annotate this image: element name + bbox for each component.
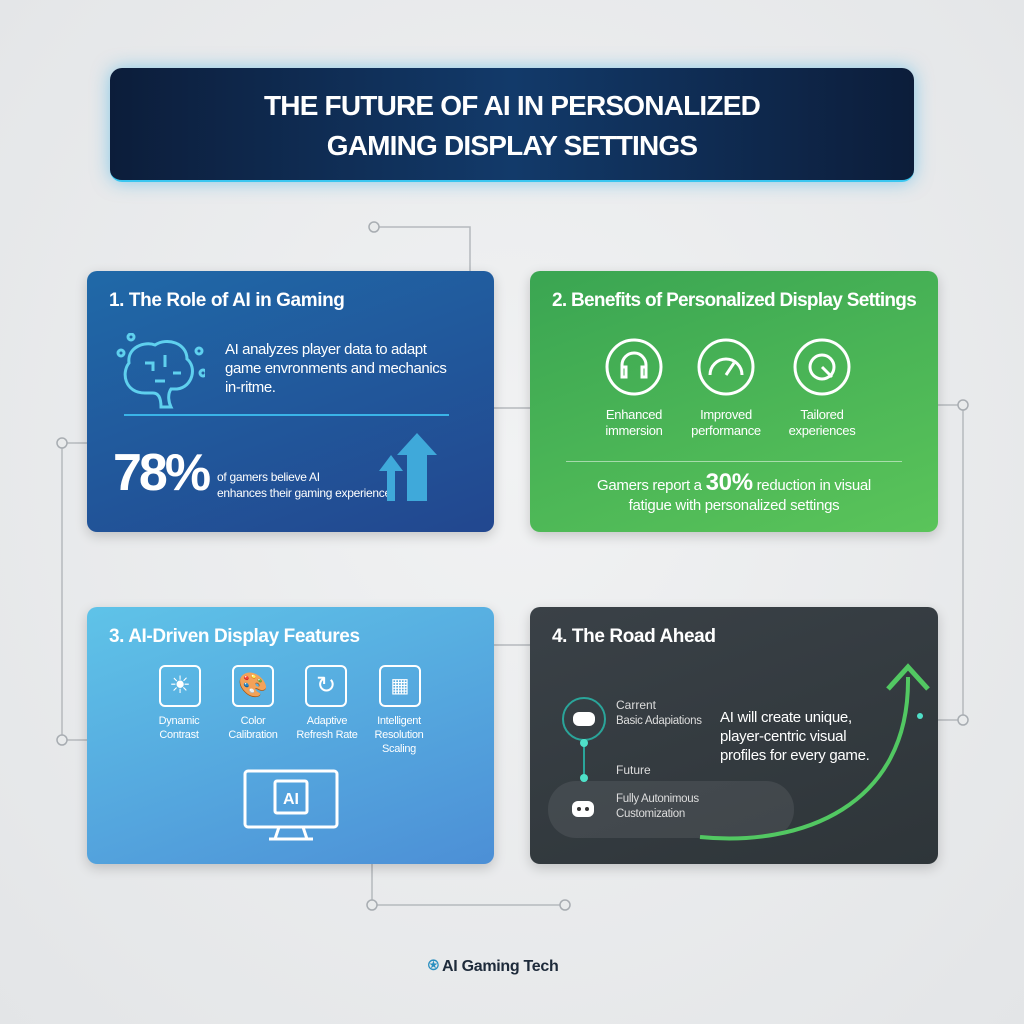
stat 78%: 78%: [113, 444, 208, 502]
text: prediction: profiles for every game.: [720, 747, 870, 764]
feature icons: Color: [241, 715, 265, 727]
title banner: [110, 68, 914, 182]
footer logo: ⍟ AI Gaming Tech: [428, 955, 558, 975]
title banner: THE FUTURE OF AI IN PERSONALIZED: [264, 90, 760, 121]
panel: benefits: [530, 271, 938, 532]
title banner: GAMING DISPLAY SETTINGS: [327, 130, 697, 161]
feature icons: 🎨: [238, 672, 268, 699]
benefit icons: immersion: [605, 423, 663, 438]
panel: road ahead: [530, 607, 938, 864]
green arrow: [700, 663, 930, 840]
panel: road ahead: Customization: [616, 808, 685, 820]
feature icons: Scaling: [382, 743, 416, 755]
panel: road ahead: Fully Autonimous: [616, 793, 699, 805]
panel: role of AI: enhances their gaming experience: [217, 486, 391, 500]
heading 3: 3. AI-Driven Display Features: [109, 626, 360, 647]
feature icons: ☀: [169, 672, 191, 699]
panel: role of AI: of gamers believe AI: [217, 470, 320, 484]
panel: role of AI: [87, 271, 494, 532]
feature icons: ▦: [391, 675, 409, 697]
benefit icons: [605, 338, 856, 438]
feature icons: Refresh Rate: [296, 729, 358, 741]
icon: AI monitor: AI: [283, 791, 299, 808]
panel: road ahead: Carrent: [616, 698, 656, 712]
panel: display features: [87, 607, 494, 864]
benefit icons: experiences: [789, 423, 855, 438]
panel: road ahead: Future: [616, 763, 651, 777]
benefit icons: Improved: [700, 407, 752, 422]
text: prediction: AI will create unique,: [720, 709, 852, 726]
future pill: [548, 781, 794, 838]
feature icons: Intelligent: [377, 715, 421, 727]
feature icons: [159, 665, 424, 755]
icon: arrows up: [379, 433, 437, 501]
text: prediction: player-centric visual: [720, 728, 846, 745]
benefit icons: performance: [691, 423, 761, 438]
benefit icons: Tailored: [800, 407, 844, 422]
stat 30%: [597, 469, 871, 514]
feature icons: Adaptive: [307, 715, 347, 727]
benefit icons: Enhanced: [606, 407, 662, 422]
heading 4: 4. The Road Ahead: [552, 626, 716, 647]
feature icons: ↻: [316, 672, 336, 699]
timeline: [562, 697, 606, 817]
text: description: AI analyzes player data to adapt game envronments and mechanics in-ritme.: [225, 341, 446, 396]
feature icons: Contrast: [159, 729, 199, 741]
icon: brain: [116, 333, 205, 408]
feature icons: Dynamic: [159, 715, 199, 727]
stat 30%: Gamers report a 30% reduction in visual: [597, 469, 871, 496]
text: prediction: [720, 709, 870, 764]
feature icons: Calibration: [228, 729, 278, 741]
feature icons: Resolution: [374, 729, 423, 741]
icon: AI monitor: [244, 770, 338, 840]
stat 30%: fatigue with personalized settings: [629, 497, 839, 514]
heading 2: 2. Benefits of Personalized Display Settings: [552, 290, 916, 311]
panel: road ahead: Basic Adapiations: [616, 715, 702, 727]
heading 1: 1. The Role of AI in Gaming: [109, 290, 345, 311]
